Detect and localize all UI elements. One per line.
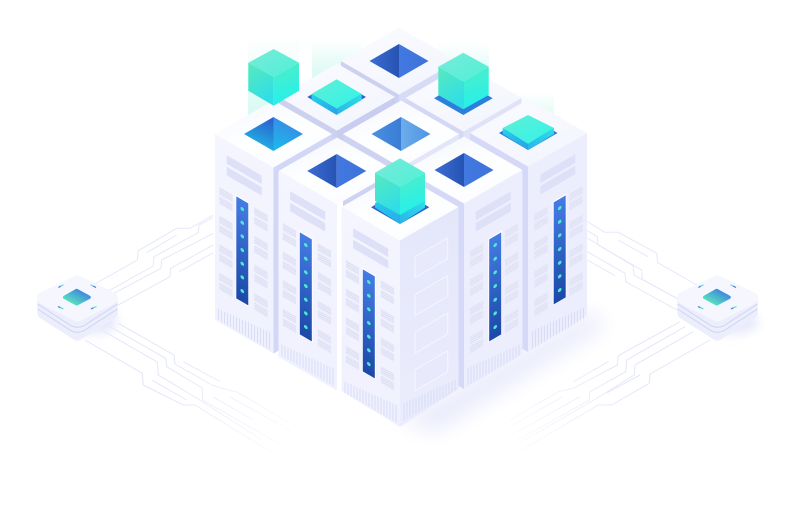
- server tower: middle right: [406, 136, 522, 389]
- server tower: centre: [343, 100, 459, 240]
- circuit traces: left module to cluster: [85, 215, 307, 453]
- glowing cube: left: [248, 49, 299, 106]
- ground shadow: [400, 312, 606, 432]
- circuit traces: right module to cluster: [487, 222, 710, 453]
- server tower: middle left: [278, 138, 396, 390]
- right network module: [678, 282, 758, 335]
- server tower: left: [215, 100, 332, 354]
- server tower: back right: [406, 64, 522, 200]
- glowing cube: front: [371, 158, 429, 224]
- light beams behind the rear cubes: [248, 36, 554, 126]
- front drive panels: [415, 238, 448, 391]
- server tower: back: [341, 28, 457, 160]
- server tower: right: [470, 100, 587, 352]
- glowing cube: back right: [434, 53, 493, 115]
- server tower: front: [342, 174, 458, 427]
- server tower: back left: [279, 64, 395, 200]
- left network module: [38, 282, 118, 335]
